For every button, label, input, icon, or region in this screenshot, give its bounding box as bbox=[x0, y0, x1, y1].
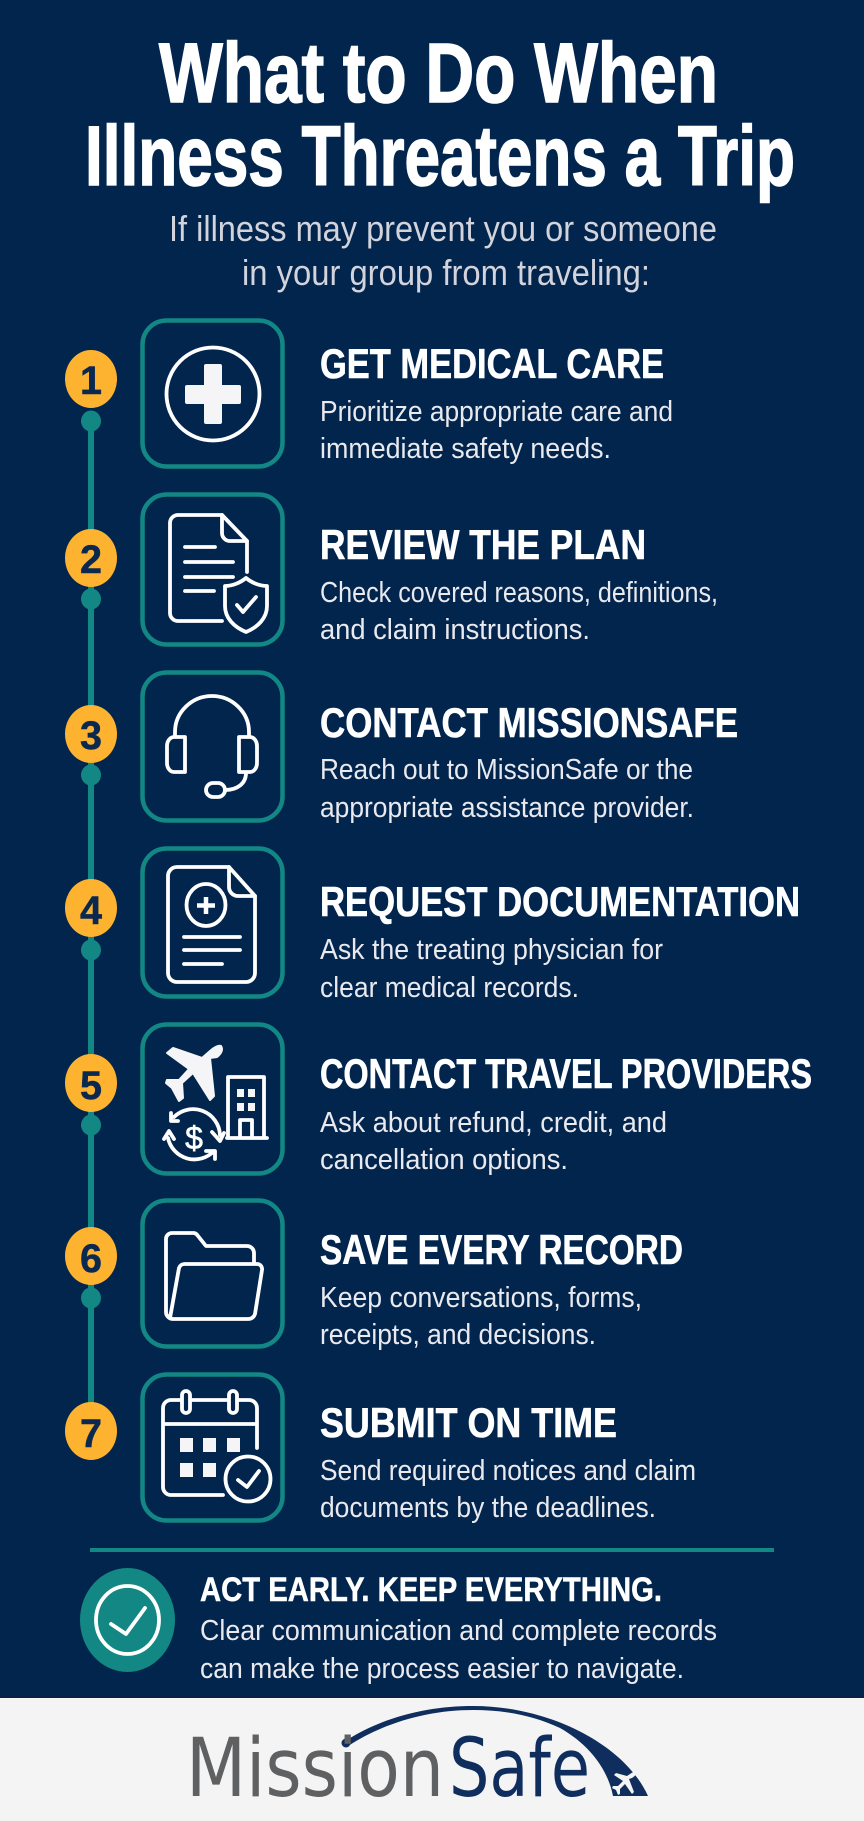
icon box: headset bbox=[142, 672, 282, 820]
step 4 text: Ask the treating physician for bbox=[320, 934, 663, 966]
MissionSafe logo: Safe bbox=[449, 1722, 590, 1816]
icon: refund cycle with dollar sign: $ bbox=[185, 1120, 203, 1156]
callout: act early bbox=[80, 1568, 717, 1685]
step 7 text: documents by the deadlines. bbox=[320, 1492, 656, 1524]
step 3: contact missionsafe bbox=[65, 672, 738, 824]
number badge 4: 4 bbox=[80, 889, 103, 933]
number badge 2: 2 bbox=[80, 538, 102, 582]
timeline connector bbox=[88, 421, 94, 1406]
number badge 3: 3 bbox=[80, 714, 102, 758]
step 6 text: Keep conversations, forms, bbox=[320, 1282, 642, 1314]
title bbox=[85, 26, 795, 203]
number badge 5 bbox=[65, 1054, 117, 1112]
number badge 1 bbox=[65, 350, 117, 408]
step 7 text bbox=[320, 1399, 696, 1524]
step 5: contact travel providers bbox=[65, 1024, 812, 1176]
icon: check badge bbox=[80, 1568, 175, 1672]
timeline dot 2 bbox=[81, 588, 101, 610]
number badge 4 bbox=[65, 879, 117, 937]
step 7 text: Send required notices and claim bbox=[320, 1455, 696, 1487]
callout text: can make the process easier to navigate. bbox=[200, 1653, 684, 1685]
timeline dot 3 bbox=[81, 764, 101, 786]
step 5 text bbox=[320, 1050, 812, 1176]
step 2: review the plan bbox=[65, 494, 718, 646]
step 6 text: SAVE EVERY RECORD bbox=[320, 1226, 683, 1273]
number badge 6 bbox=[65, 1227, 117, 1285]
timeline dot 4 bbox=[81, 940, 101, 960]
step 2 text: and claim instructions. bbox=[320, 614, 590, 646]
step 5 text: cancellation options. bbox=[320, 1144, 568, 1176]
callout text: Clear communication and complete records bbox=[200, 1615, 717, 1647]
icon: airplane bbox=[166, 1046, 222, 1101]
number badge 3 bbox=[65, 705, 117, 763]
step 2 text bbox=[320, 521, 718, 646]
number badge 1: 1 bbox=[80, 359, 102, 403]
step 2 text: Check covered reasons, definitions, bbox=[320, 577, 718, 609]
step 1 text: immediate safety needs. bbox=[320, 433, 611, 465]
icon box: plane, hotel and refund bbox=[142, 1024, 282, 1174]
number badge 5: 5 bbox=[80, 1064, 102, 1108]
timeline dot 5 bbox=[81, 1114, 101, 1136]
step 1: get medical care bbox=[65, 320, 673, 466]
icon: hotel building bbox=[227, 1077, 267, 1138]
step 2 text: REVIEW THE PLAN bbox=[320, 521, 646, 568]
title: What to Do When bbox=[159, 26, 718, 120]
MissionSafe logo bbox=[186, 1706, 648, 1816]
subtitle: in your group from traveling: bbox=[242, 252, 650, 293]
step 4 text: clear medical records. bbox=[320, 972, 579, 1004]
step 3 text: Reach out to MissionSafe or the bbox=[320, 754, 693, 786]
step 1 text: Prioritize appropriate care and bbox=[320, 396, 673, 428]
logo wordmark: Mission bbox=[186, 1722, 444, 1816]
step 7 text: SUBMIT ON TIME bbox=[320, 1399, 617, 1446]
step 3 text bbox=[320, 699, 738, 824]
subtitle bbox=[169, 208, 717, 293]
icon: refund cycle with dollar sign bbox=[164, 1109, 224, 1159]
callout text bbox=[200, 1571, 717, 1685]
step 7: submit on time bbox=[65, 1374, 696, 1524]
step 3 text: appropriate assistance provider. bbox=[320, 792, 694, 824]
step 5 text: Ask about refund, credit, and bbox=[320, 1107, 667, 1139]
number badge 2 bbox=[65, 529, 117, 587]
icon box: document with shield bbox=[142, 494, 282, 644]
step 1 text: GET MEDICAL CARE bbox=[320, 340, 664, 387]
number badge 7 bbox=[65, 1402, 117, 1460]
footer logo band bbox=[0, 1696, 864, 1821]
step 6 text: receipts, and decisions. bbox=[320, 1319, 596, 1351]
subtitle: If illness may prevent you or someone bbox=[169, 208, 717, 249]
step 3 text: CONTACT MISSIONSAFE bbox=[320, 699, 738, 746]
callout text: ACT EARLY. KEEP EVERYTHING. bbox=[200, 1571, 662, 1609]
timeline dot 1 bbox=[81, 410, 101, 432]
step 6: save every record bbox=[65, 1200, 683, 1351]
step 1 text bbox=[320, 340, 673, 465]
icon box: calendar with check bbox=[142, 1374, 282, 1520]
number badge 6: 6 bbox=[80, 1237, 102, 1281]
icon box: folder bbox=[142, 1200, 282, 1346]
divider bbox=[90, 1548, 774, 1552]
step 4 text bbox=[320, 878, 800, 1004]
logo plane bbox=[612, 1771, 637, 1795]
icon box: medical cross bbox=[142, 320, 282, 466]
icon box: medical record bbox=[142, 848, 282, 996]
logo swoosh bbox=[347, 1706, 648, 1796]
timeline dot 6 bbox=[81, 1288, 101, 1308]
step 6 text bbox=[320, 1226, 683, 1351]
number badge 7: 7 bbox=[80, 1412, 102, 1456]
step 4: request documentation bbox=[65, 848, 800, 1004]
